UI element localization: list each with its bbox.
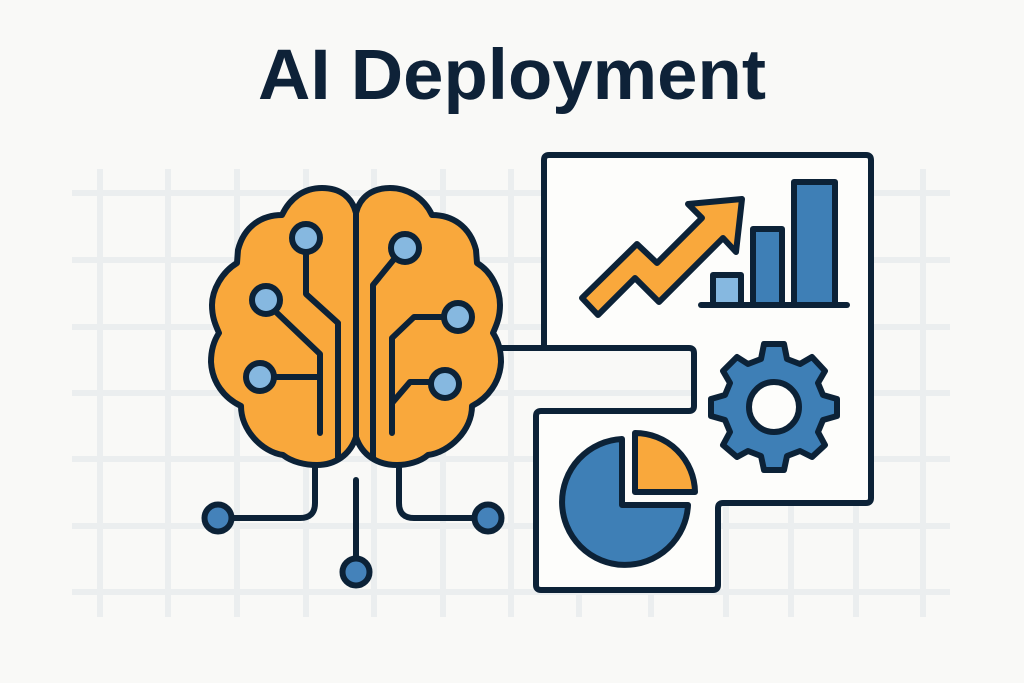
circuit nodes	[246, 224, 472, 398]
icon: trend arrow	[582, 199, 742, 315]
icon: gear	[711, 344, 837, 470]
brain	[211, 188, 501, 465]
panel: analytics	[498, 155, 871, 590]
brain: left hemisphere	[211, 188, 356, 465]
connector bracket	[498, 345, 544, 351]
brain: right hemisphere	[356, 188, 501, 465]
network connectors	[204, 468, 502, 586]
title: AI Deployment	[258, 36, 766, 115]
bar chart	[701, 182, 847, 305]
pie chart	[562, 433, 695, 565]
circuit traces	[272, 213, 446, 458]
